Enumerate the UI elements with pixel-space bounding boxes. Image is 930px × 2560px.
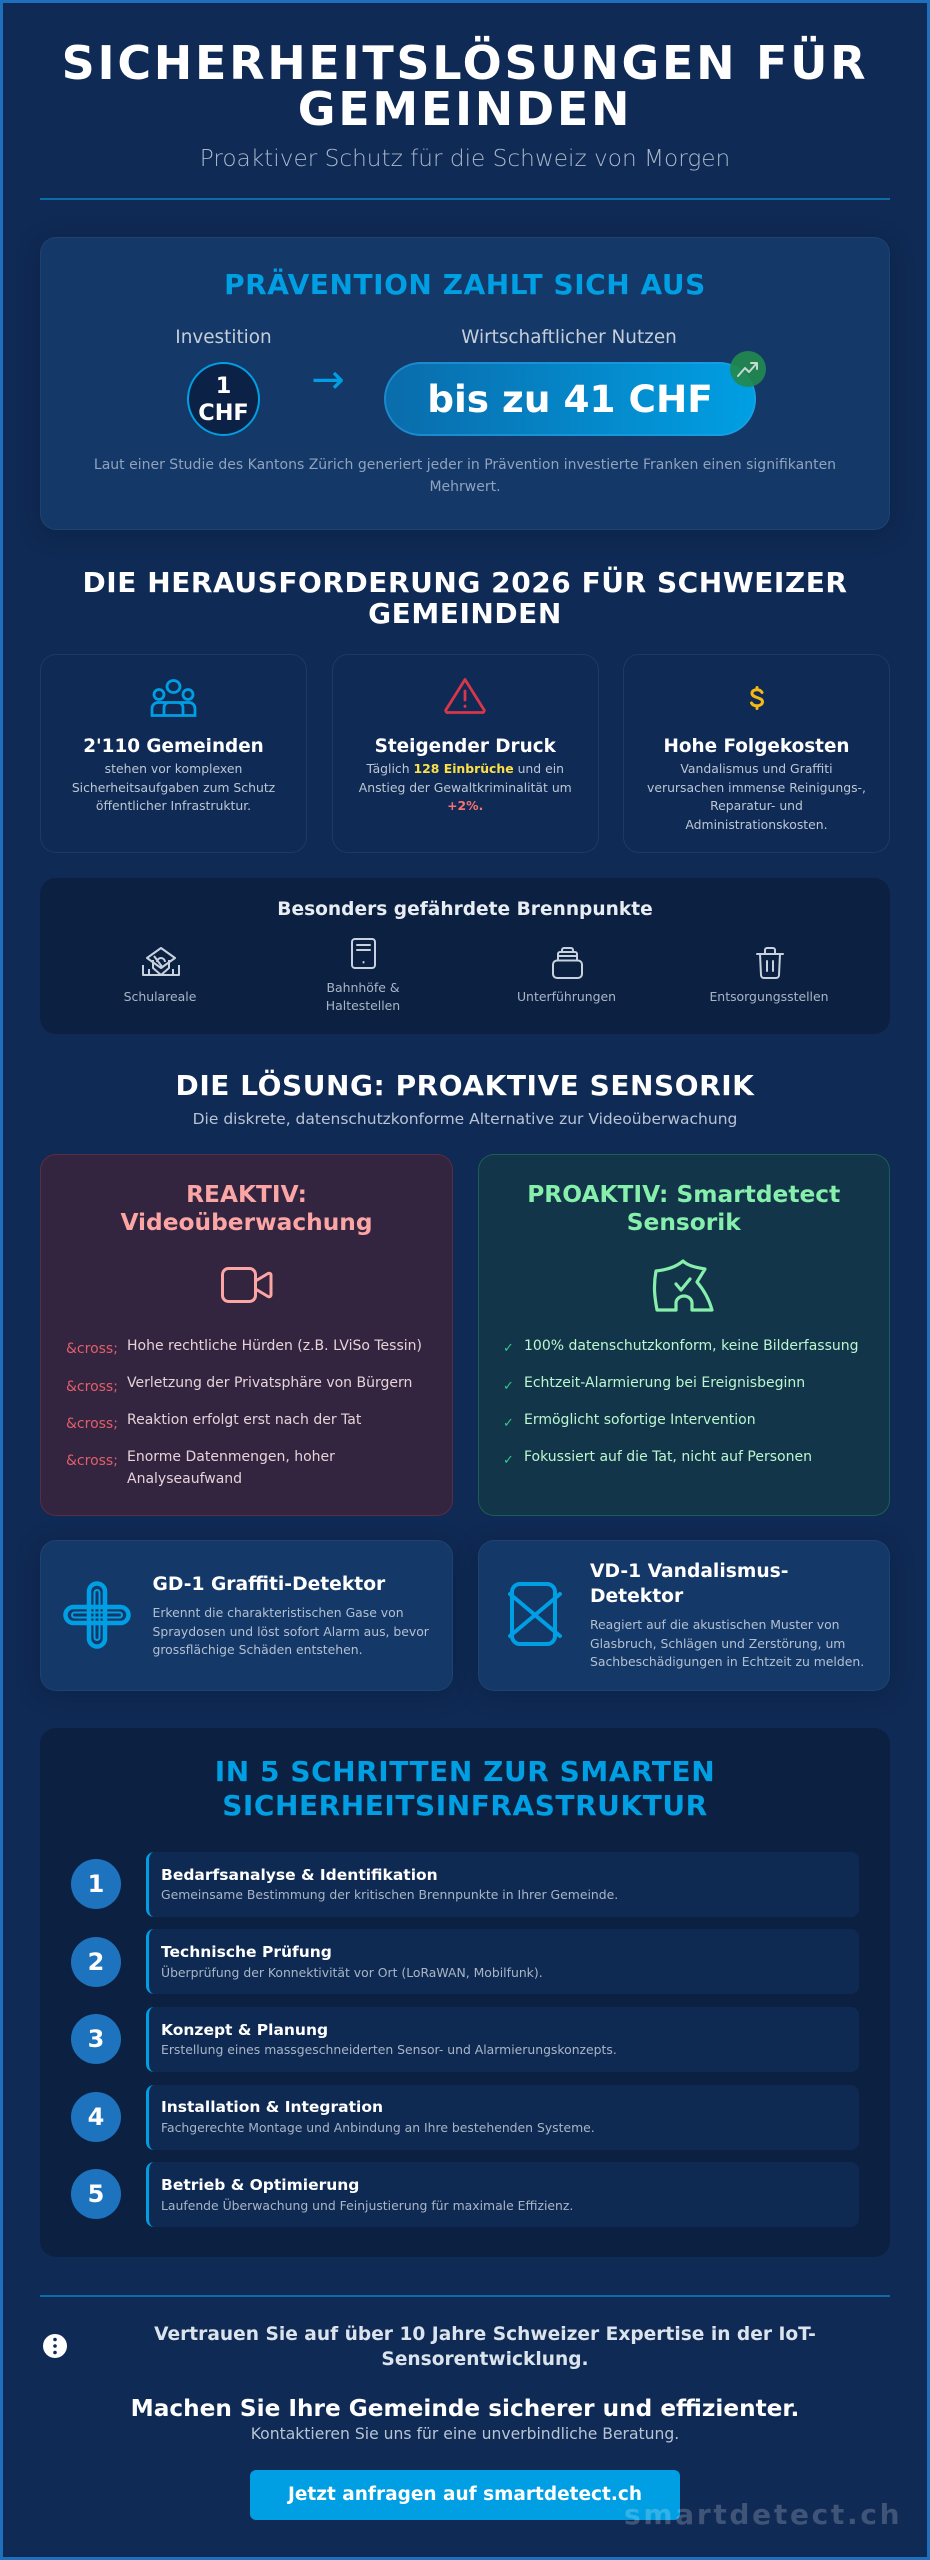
label: stations and stops bbox=[326, 980, 400, 1013]
panel heading bbox=[215, 1755, 715, 1822]
card text bbox=[358, 761, 572, 813]
arrow: → bbox=[311, 356, 345, 402]
card text: Reparatur- und bbox=[710, 798, 803, 813]
step number 3: 3 bbox=[88, 2025, 104, 2053]
panel heading: IN 5 SCHRITTEN ZUR SMARTEN bbox=[215, 1755, 715, 1788]
call to action text: Kontaktieren Sie uns für eine unverbindliche Beratung. bbox=[251, 2425, 679, 2443]
drawback 1 text: Hohe rechtliche Hürden (z.B. LViSo Tessin) bbox=[127, 1338, 422, 1354]
icon: dollar sign bbox=[750, 686, 764, 710]
step number 4 bbox=[71, 2092, 121, 2142]
benefit 4 text: Fokussiert auf die Tat, nicht auf Personen bbox=[524, 1449, 812, 1465]
detector title: GD-1 Graffiti-Detektor bbox=[152, 1574, 385, 1595]
card text bbox=[647, 761, 866, 832]
label: investment: Investition bbox=[175, 327, 272, 348]
heading: the challenge bbox=[82, 566, 848, 630]
step 2 text: Überprüfung der Konnektivität vor Ort (LoRaWAN, Mobilfunk). bbox=[161, 1965, 543, 1980]
drawback 4 text: Enorme Datenmengen, hoher bbox=[127, 1449, 335, 1465]
label: economic benefit: Wirtschaftlicher Nutzen bbox=[461, 327, 677, 348]
circle: 1 CHF: CHF bbox=[198, 400, 249, 426]
drawback 4: &cross; bbox=[66, 1453, 118, 1469]
label: school grounds: Schulareale bbox=[124, 989, 196, 1004]
step 1 title: Bedarfsanalyse & Identifikation bbox=[161, 1866, 438, 1884]
benefit list bbox=[503, 1338, 858, 1468]
icon: info dots bbox=[43, 2334, 67, 2358]
drawback 4 text: Analyseaufwand bbox=[127, 1471, 242, 1487]
icon: people group bbox=[150, 679, 196, 717]
detector title: Detektor bbox=[590, 1586, 683, 1607]
benefit 3 text: Ermöglicht sofortige Intervention bbox=[524, 1412, 756, 1428]
step 3 bbox=[146, 2007, 859, 2072]
detector title: VD-1 Vandalismus- bbox=[590, 1561, 789, 1582]
button: Jetzt anfragen auf smartdetect.ch bbox=[288, 2484, 642, 2505]
step 4 text: Fachgerechte Montage und Anbindung an Ihre bestehenden Systeme. bbox=[161, 2120, 595, 2135]
drawback 3 text: Reaktion erfolgt erst nach der Tat bbox=[127, 1412, 361, 1428]
drawback list bbox=[66, 1338, 422, 1487]
detector title bbox=[590, 1561, 789, 1607]
label: stations and stops: Bahnhöfe & bbox=[326, 980, 400, 994]
card: municipalities bbox=[40, 654, 307, 853]
detector text bbox=[590, 1617, 864, 1669]
panel: VD-1 vandalism detector bbox=[478, 1540, 890, 1691]
benefit 1 text: 100% datenschutzkonform, keine Bilderfassung bbox=[524, 1338, 858, 1354]
panel heading: Besonders gefährdete Brennpunkte bbox=[277, 899, 653, 920]
panel: GD-1 graffiti detector bbox=[40, 1540, 453, 1691]
label: underpasses: Unterführungen bbox=[517, 989, 616, 1004]
card text: Vandalismus und Graffiti bbox=[680, 761, 833, 776]
title: SICHERHEITSLÖSUNGEN FÜR bbox=[62, 36, 868, 90]
solution subtitle: Die diskrete, datenschutzkonforme Alternative zur Videoüberwachung bbox=[193, 1110, 737, 1128]
call to action heading: Machen Sie Ihre Gemeinde sicherer und effizienter. bbox=[131, 2395, 799, 2422]
benefit 1: ✓ bbox=[503, 1341, 514, 1356]
card title: 2'110 Gemeinden bbox=[83, 736, 264, 757]
card text: Administrationskosten. bbox=[685, 817, 828, 832]
card text: Anstieg der Gewaltkriminalität um bbox=[359, 780, 572, 795]
card title: Steigender Druck bbox=[375, 736, 556, 757]
step number 3 bbox=[71, 2014, 121, 2064]
card text: verursachen immense Reinigungs-, bbox=[647, 780, 866, 795]
trust statement: Vertrauen Sie auf über 10 Jahre Schweizer Expertise in der IoT- bbox=[154, 2324, 816, 2344]
card text: öffentlicher Infrastruktur. bbox=[96, 798, 251, 813]
study note: Mehrwert. bbox=[429, 479, 501, 495]
step 4 bbox=[146, 2084, 859, 2150]
card text: Täglich 128 Einbrüche und ein bbox=[366, 761, 564, 776]
drawback 1: &cross; bbox=[66, 1341, 118, 1357]
study note: Laut einer Studie des Kantons Zürich generiert jeder in Prävention investierte Franken einen signifikanten bbox=[94, 457, 836, 473]
trust statement bbox=[154, 2324, 816, 2370]
detector text: Reagiert auf die akustischen Muster von bbox=[590, 1617, 840, 1632]
icon: graffiti cross bbox=[63, 1581, 131, 1649]
panel heading: PROAKTIV: Smartdetect bbox=[527, 1181, 840, 1208]
step number 2: 2 bbox=[88, 1948, 104, 1976]
card: high follow-up costs bbox=[623, 654, 890, 853]
step 2 bbox=[146, 1929, 859, 1994]
detector text bbox=[152, 1605, 429, 1657]
drawback 2 text: Verletzung der Privatsphäre von Bürgern bbox=[127, 1375, 412, 1391]
panel: reactive video surveillance bbox=[40, 1154, 453, 1516]
pill: up to 41 CHF bbox=[384, 362, 756, 436]
step 5 title: Betrieb & Optimierung bbox=[161, 2176, 359, 2194]
step 5 bbox=[146, 2162, 859, 2227]
benefit 3: ✓ bbox=[503, 1416, 514, 1431]
button bbox=[250, 2470, 680, 2520]
label: stations and stops: Haltestellen bbox=[326, 998, 400, 1013]
panel: proactive smartdetect sensors bbox=[478, 1154, 890, 1516]
benefit 2: ✓ bbox=[503, 1379, 514, 1394]
circle: 1 CHF bbox=[187, 362, 260, 436]
title: GEMEINDEN bbox=[298, 82, 632, 136]
benefit 2 text: Echtzeit-Alarmierung bei Ereignisbeginn bbox=[524, 1375, 805, 1391]
detector text: grossflächige Schäden entstehen. bbox=[152, 1642, 363, 1657]
study note bbox=[94, 457, 836, 495]
card: rising pressure bbox=[332, 654, 598, 853]
icon: underpass bbox=[552, 947, 583, 979]
step 4 title: Installation & Integration bbox=[161, 2098, 383, 2116]
panel heading: REAKTIV: bbox=[186, 1181, 307, 1208]
icon: station bbox=[351, 938, 376, 969]
panel heading: Videoüberwachung bbox=[120, 1209, 373, 1236]
watermark: smartdetect.ch bbox=[624, 2498, 902, 2531]
pill: up to 41 CHF: bis zu 41 CHF bbox=[427, 377, 713, 421]
drawback 3: &cross; bbox=[66, 1416, 118, 1432]
icon: school bbox=[142, 947, 180, 976]
step 2 title: Technische Prüfung bbox=[161, 1943, 332, 1961]
card text: Sicherheitsaufgaben zum Schutz bbox=[72, 780, 275, 795]
detector text: Erkennt die charakteristischen Gase von bbox=[152, 1605, 404, 1620]
card text bbox=[72, 761, 275, 813]
step number 1: 1 bbox=[88, 1870, 104, 1898]
panel: prevention pays off bbox=[40, 237, 890, 530]
heading: the challenge: DIE HERAUSFORDERUNG 2026 FÜR SCHWEIZER bbox=[82, 566, 848, 599]
detector text: Glasbruch, Schlägen und Zerstörung, um bbox=[590, 1636, 845, 1651]
icon: trash bin bbox=[756, 947, 784, 979]
step 5 text: Laufende Überwachung und Feinjustierung für maximale Effizienz. bbox=[161, 2198, 573, 2213]
subtitle: Proaktiver Schutz für die Schweiz von Morgen bbox=[200, 145, 730, 172]
panel: five steps bbox=[40, 1728, 890, 2257]
drawback 2: &cross; bbox=[66, 1379, 118, 1395]
trust statement: Sensorentwicklung. bbox=[381, 2348, 589, 2370]
card text: stehen vor komplexen bbox=[105, 761, 242, 776]
benefit 4: ✓ bbox=[503, 1453, 514, 1468]
icon: broken glass bbox=[508, 1582, 562, 1646]
panel heading: PRÄVENTION ZAHLT SICH AUS bbox=[224, 268, 706, 301]
icon: trending up badge bbox=[730, 351, 766, 387]
panel heading: Sensorik bbox=[627, 1209, 741, 1236]
panel heading bbox=[527, 1181, 840, 1236]
step number 5: 5 bbox=[88, 2180, 104, 2208]
drawback 4 text bbox=[127, 1449, 335, 1487]
step 1 text: Gemeinsame Bestimmung der kritischen Brennpunkte in Ihrer Gemeinde. bbox=[161, 1887, 618, 1902]
detector text: Spraydosen und löst sofort Alarm aus, bevor bbox=[152, 1624, 429, 1639]
card title: Hohe Folgekosten bbox=[663, 736, 850, 757]
title bbox=[62, 36, 868, 136]
panel heading: SICHERHEITSINFRASTRUKTUR bbox=[222, 1789, 708, 1822]
circle: 1 CHF: 1 bbox=[216, 372, 231, 398]
icon: video camera bbox=[221, 1267, 272, 1303]
icon: warning triangle bbox=[444, 678, 486, 714]
detector text: Sachbeschädigungen in Echtzeit zu melden. bbox=[590, 1654, 864, 1669]
step number 5 bbox=[71, 2169, 121, 2219]
panel heading bbox=[120, 1181, 373, 1236]
step 1 bbox=[146, 1852, 859, 1917]
header divider bbox=[40, 198, 890, 200]
label: disposal sites: Entsorgungsstellen bbox=[709, 989, 829, 1004]
step number 2 bbox=[71, 1937, 121, 1987]
footer divider bbox=[40, 2295, 890, 2297]
step 3 text: Erstellung eines massgeschneiderten Sensor- und Alarmierungskonzepts. bbox=[161, 2042, 617, 2057]
step number 4: 4 bbox=[88, 2103, 104, 2131]
heading: the challenge: GEMEINDEN bbox=[368, 597, 562, 630]
heading: the solution: DIE LÖSUNG: PROAKTIVE SENSORIK bbox=[176, 1069, 754, 1102]
card text: +2%. bbox=[447, 798, 483, 813]
panel: hot spots bbox=[40, 878, 890, 1034]
step 3 title: Konzept & Planung bbox=[161, 2021, 328, 2039]
step number 1 bbox=[71, 1859, 121, 1909]
icon: shield house bbox=[652, 1259, 714, 1312]
